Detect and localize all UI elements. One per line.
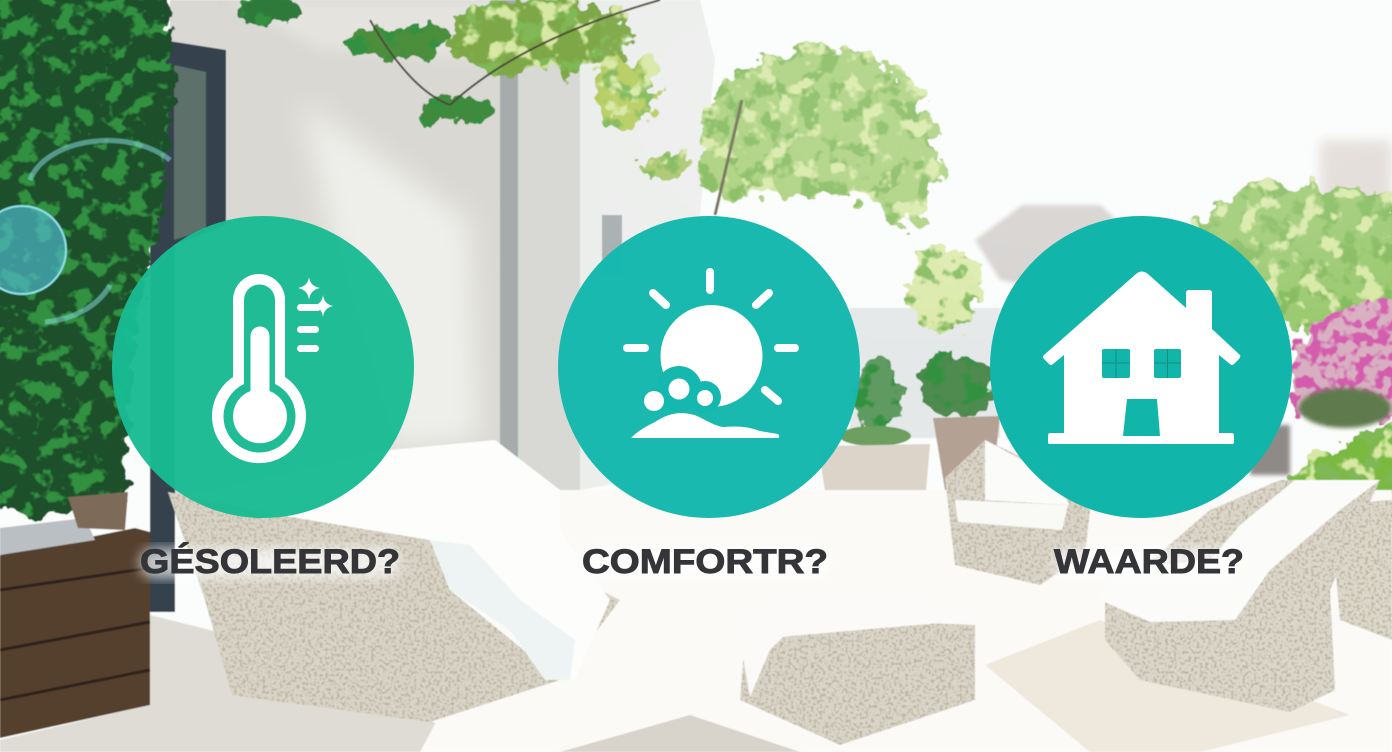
wooden side table with books [0, 492, 150, 738]
wicker sofa [168, 440, 620, 722]
house wall [170, 0, 715, 500]
back wall [850, 308, 1000, 438]
terrace floor [0, 490, 1392, 752]
wicker ottoman [735, 590, 985, 745]
badge circle: insulation [112, 216, 414, 518]
neighbour roof [975, 205, 1115, 290]
shrubs behind planters [839, 244, 993, 446]
icon: house [1043, 272, 1240, 444]
tree in sunlight [700, 45, 940, 230]
wicker armchair, right [1100, 480, 1392, 712]
label: comfort: COMFORTR? [582, 543, 828, 581]
badge circle: value [990, 216, 1292, 518]
wicker armchair, middle [945, 440, 1090, 585]
label: value: WAARDE? [1054, 543, 1244, 581]
planters [818, 416, 1220, 540]
panel: value [990, 216, 1292, 518]
badge circle: comfort [558, 216, 860, 518]
label: insulated: GÉSOLEERD? [140, 543, 400, 581]
left climbing plants [0, 0, 175, 515]
label halos [140, 548, 1244, 578]
window and door frame [150, 38, 226, 612]
holographic globe [0, 141, 170, 322]
drain pipe [500, 0, 518, 480]
icon: sun over hill with clouds [627, 272, 795, 438]
panel: insulation [112, 216, 414, 518]
overhanging branches [236, 0, 691, 177]
panel: comfort [558, 216, 860, 518]
sunlight bloom over the centre and top right [600, 0, 1392, 340]
icon: thermometer [212, 274, 333, 463]
right garden [1190, 140, 1392, 510]
